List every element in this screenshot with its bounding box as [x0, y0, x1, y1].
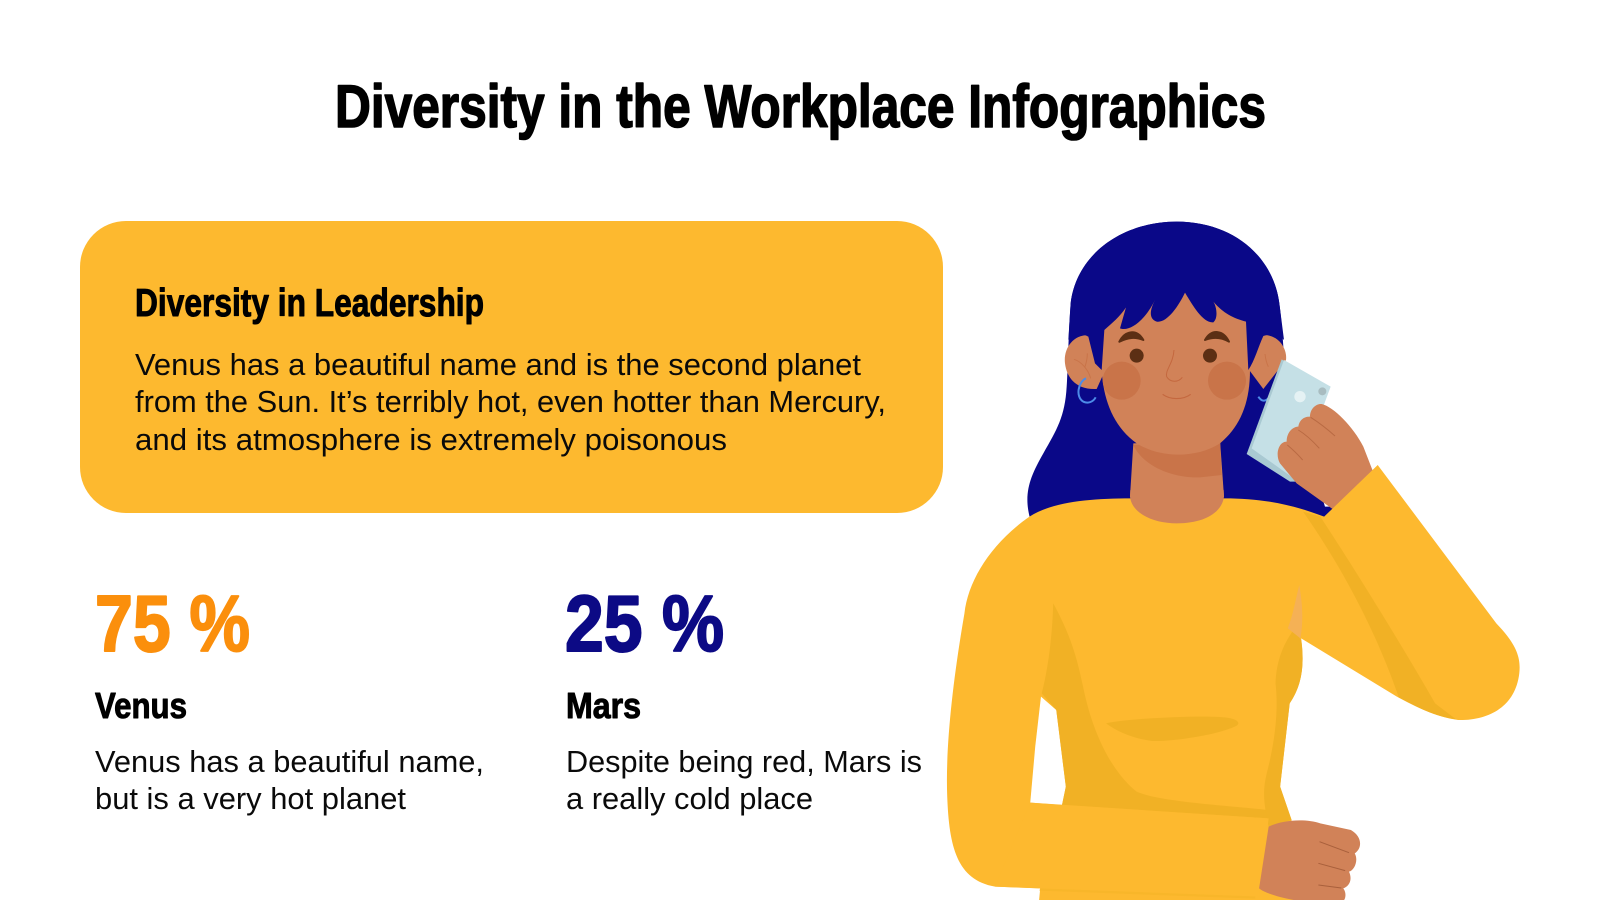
lower hand: [1259, 820, 1360, 900]
Venus description: [95, 744, 484, 816]
illustration: woman on phone: [947, 222, 1520, 900]
panel body text: from the Sun. It’s terribly hot, even hotter than Mercury,: [135, 384, 886, 419]
woman head and hair: [1027, 222, 1347, 528]
Mars label: Mars: [566, 685, 641, 726]
Mars description: [566, 744, 922, 816]
stat: Mars: [565, 579, 922, 816]
Mars description: Despite being red, Mars is: [566, 744, 922, 779]
panel: diversity in leadership: [80, 221, 943, 513]
Venus percentage: 75 %: [95, 579, 250, 668]
stat: Venus: [95, 579, 484, 816]
sweater: [947, 465, 1520, 900]
Venus description: but is a very hot planet: [95, 781, 406, 816]
Mars percentage: 25 %: [565, 579, 724, 668]
Mars description: a really cold place: [566, 781, 813, 816]
panel heading: Diversity in Leadership: [135, 282, 484, 325]
phone: [1247, 359, 1331, 482]
title: Diversity in the Workplace Infographics: [335, 73, 1266, 140]
raised hand: [1278, 404, 1375, 520]
neck over collar: [1130, 490, 1224, 523]
panel body text: [135, 347, 886, 457]
Venus description: Venus has a beautiful name,: [95, 744, 484, 779]
panel body text: Venus has a beautiful name and is the second planet: [135, 347, 861, 382]
panel body text: and its atmosphere is extremely poisonous: [135, 422, 727, 457]
Venus label: Venus: [95, 685, 187, 726]
